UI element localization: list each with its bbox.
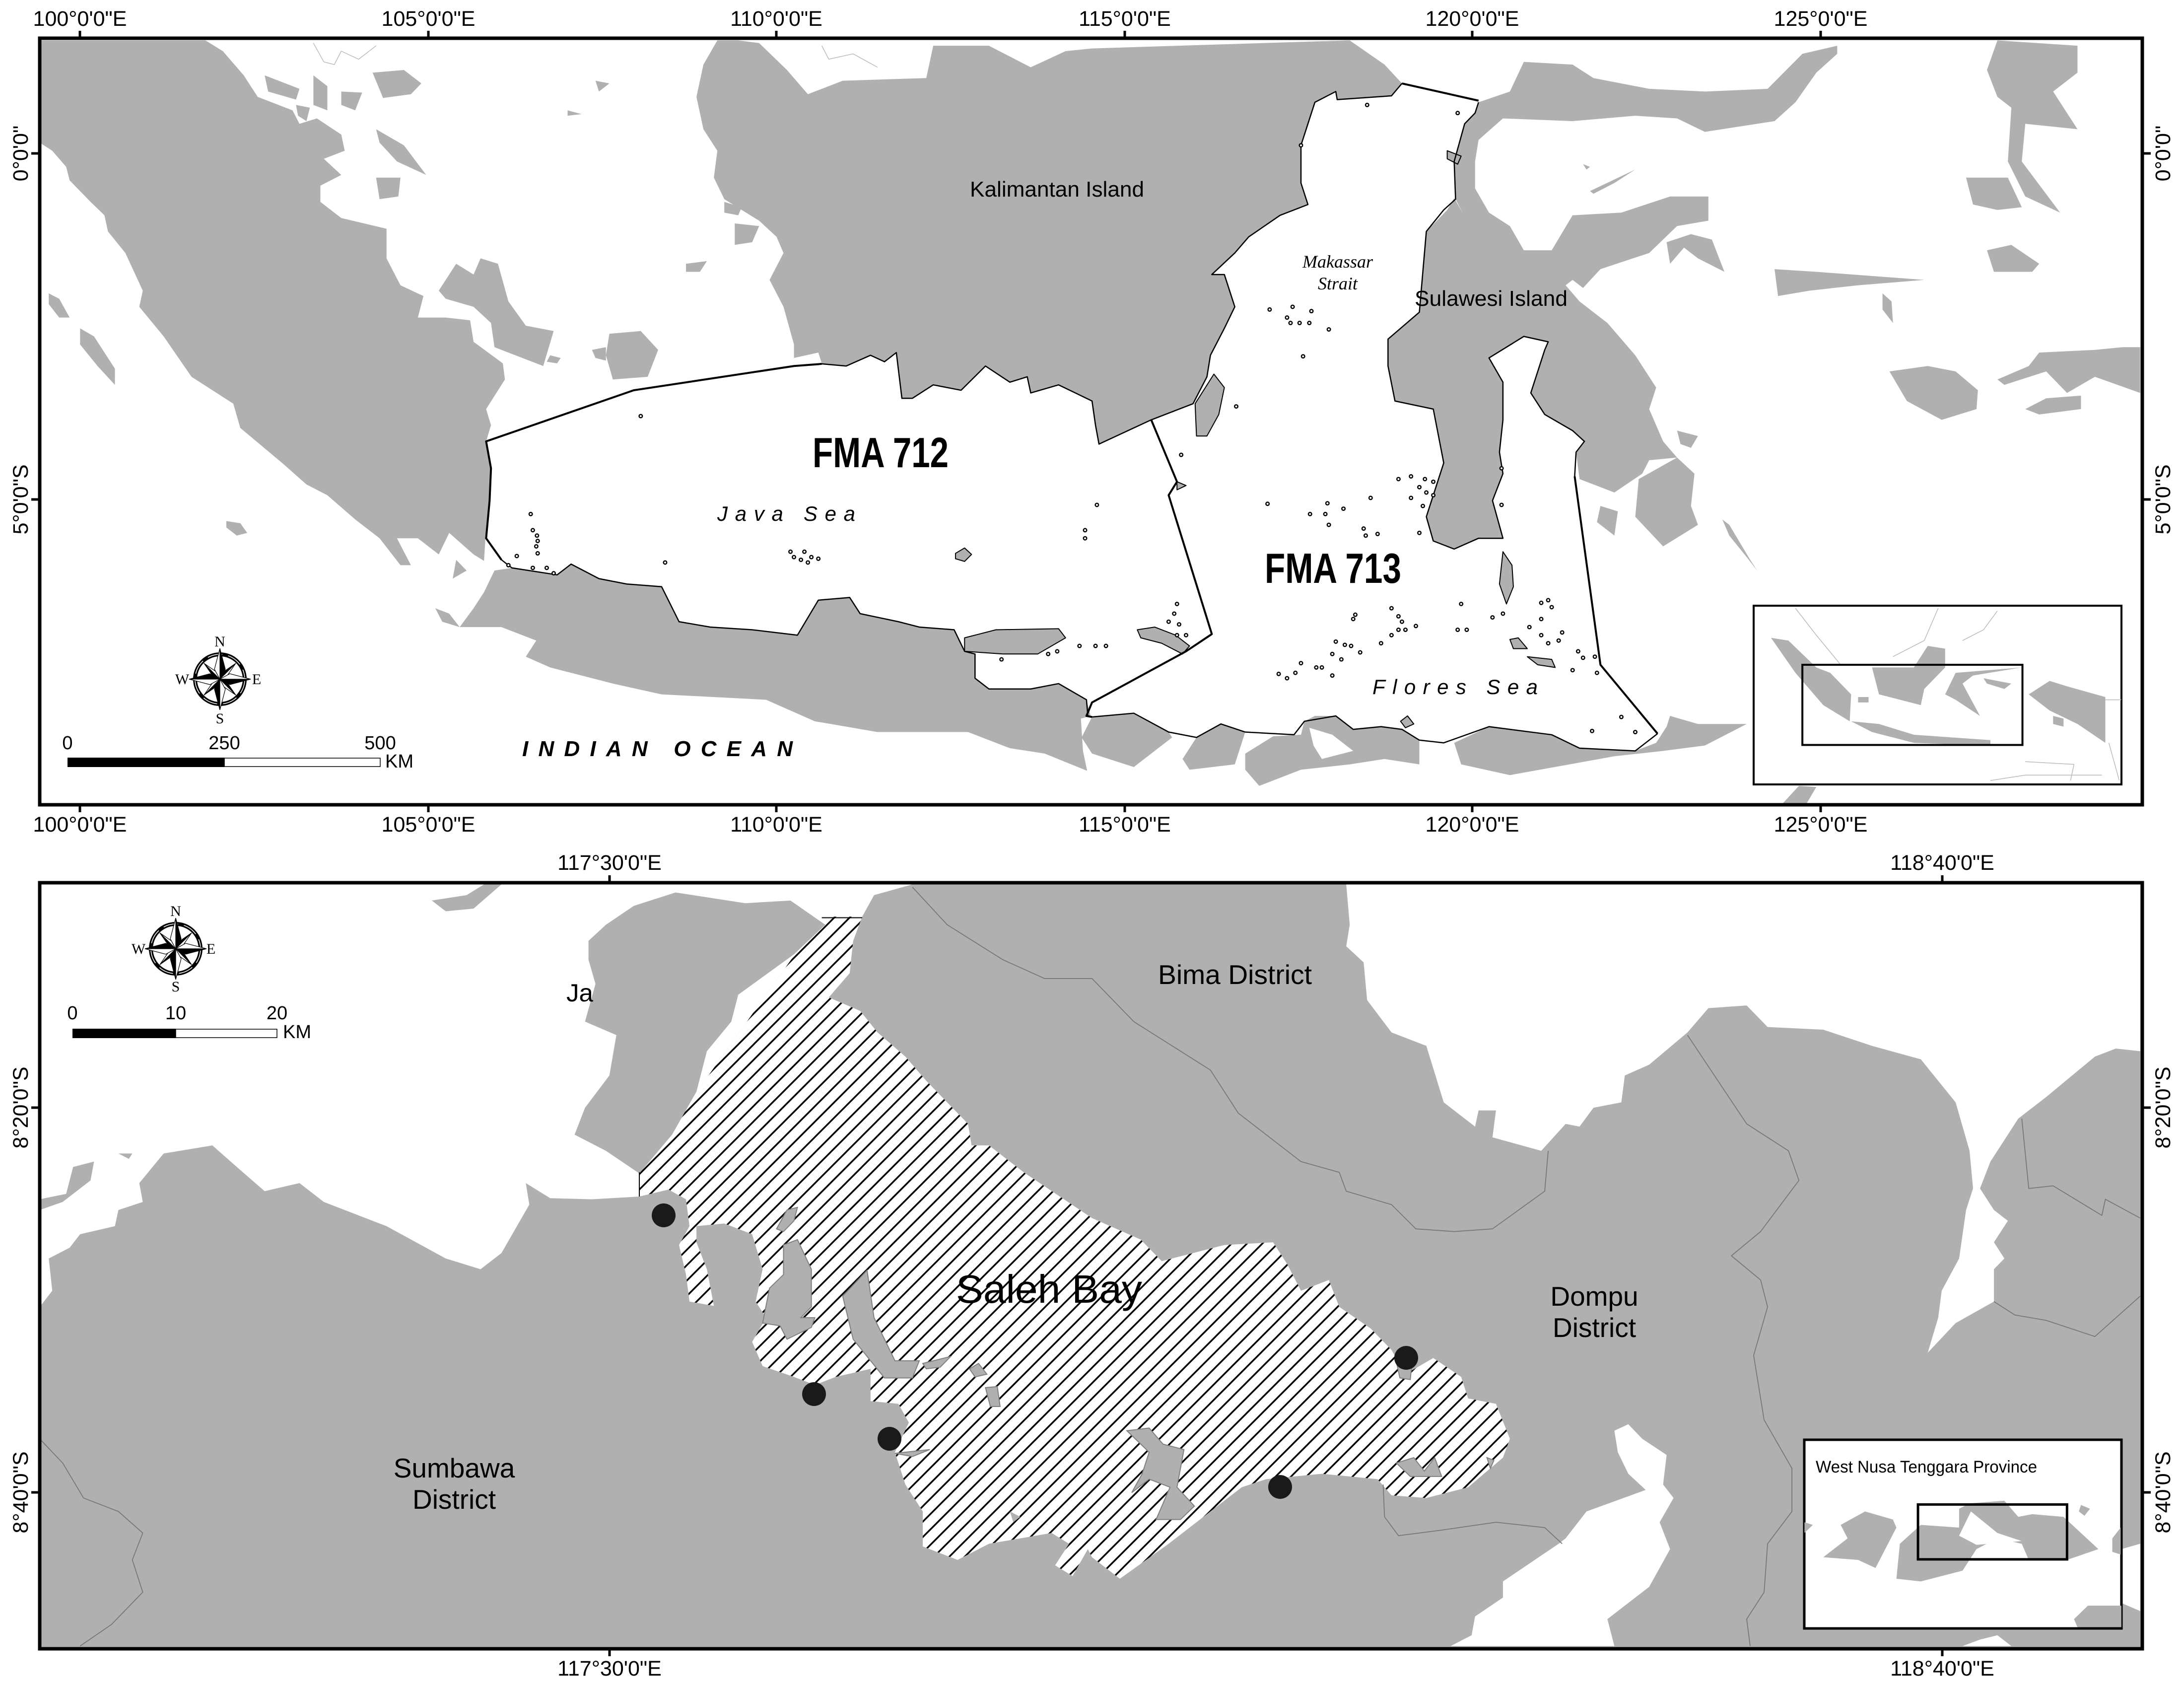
longitude labels top: 125°0'0"E — [1774, 7, 1867, 31]
longitude labels bottom: 100°0'0"E — [33, 813, 127, 837]
small reef islands — [508, 105, 1635, 732]
scale bar: top map: 250 — [208, 733, 240, 754]
longitude labels top: 100°0'0"E — [33, 7, 127, 31]
label: Makassar Strait: Strait — [1318, 274, 1358, 293]
label: Ja: Ja — [566, 979, 593, 1007]
latitude labels: 5°0'0"S — [9, 464, 33, 535]
label: FMA 712: FMA 712 — [813, 429, 949, 477]
sea, bay and islands of Saleh Bay map — [40, 884, 2140, 1646]
scale bar: Saleh Bay map: 10 — [165, 1003, 186, 1024]
Saleh Bay water in regional map — [1309, 728, 1353, 759]
scale bar: Saleh Bay map: 0 — [67, 1003, 78, 1024]
longitude labels top: 120°0'0"E — [1426, 7, 1519, 31]
panel frame — [40, 38, 2142, 805]
latitude labels — [9, 126, 2175, 535]
scale bar: top map: 0 — [62, 733, 73, 754]
south sea — [1451, 1424, 1674, 1646]
inset land — [1804, 1501, 2121, 1627]
latitude labels: 8°20'0"S — [9, 1066, 33, 1149]
label: Sulawesi Island: Sulawesi Island — [1415, 286, 1568, 311]
label: Kalimantan Island: Kalimantan Island — [970, 177, 1144, 202]
panel: Saleh Bay map — [9, 851, 2175, 1681]
scale bar: top map — [62, 733, 413, 772]
longitude labels top: 117°30'0"E — [557, 851, 662, 875]
longitude labels bottom: 125°0'0"E — [1774, 813, 1867, 837]
Moyo island — [575, 893, 825, 1174]
latitude labels: 0°0'0" — [9, 126, 33, 181]
scale bar: Saleh Bay map: KM — [283, 1022, 311, 1043]
land masses: regional map — [40, 40, 2140, 805]
inset extent box — [1802, 665, 2023, 745]
compass rose: Saleh Bay map: N — [170, 903, 181, 919]
longitude labels top: 110°0'0"E — [730, 7, 822, 31]
longitude labels bottom: 115°0'0"E — [1079, 813, 1171, 837]
longitude labels top — [33, 7, 1867, 31]
latitude labels: 8°20'0"S — [2151, 1066, 2175, 1149]
panel: regional map FMA 712 and 713 — [9, 7, 2175, 837]
coast lines bordering FMA areas — [501, 83, 1657, 751]
islands in Saleh Bay — [762, 1207, 1494, 1520]
label: Dompu District: Dompu — [1550, 1281, 1638, 1312]
longitude labels bottom — [33, 813, 1867, 837]
label: Saleh Bay: Saleh Bay — [956, 1267, 1142, 1311]
compass rose: top map: W — [175, 671, 190, 688]
label: Flores Sea: Flores Sea — [1372, 675, 1538, 699]
label: Java Sea: Java Sea — [717, 502, 855, 525]
label: Sumbawa District: District — [412, 1484, 496, 1515]
outlined island group — [1137, 151, 1555, 728]
tick marks — [31, 31, 2151, 812]
longitude labels top: 118°40'0"E — [1890, 851, 1994, 875]
scale bar: top map: 500 — [364, 733, 396, 754]
longitude labels top: 105°0'0"E — [382, 7, 475, 31]
longitude labels bottom: 118°40'0"E — [1890, 1657, 1994, 1681]
scale bar: Saleh Bay map — [67, 1003, 311, 1043]
survey sites — [652, 1203, 1418, 1499]
label: Bima District: Bima District — [1158, 959, 1312, 990]
scale bar: Saleh Bay map: 20 — [267, 1003, 287, 1024]
compass rose: Saleh Bay map: W — [132, 941, 146, 957]
latitude labels: 5°0'0"S — [2151, 464, 2175, 535]
inset extent box — [1918, 1504, 2067, 1559]
inset title: West Nusa Tenggara Province — [1816, 1458, 2037, 1477]
Madura — [964, 629, 1066, 654]
Lesser Sunda islands — [1082, 713, 1816, 805]
inset: West Nusa Tenggara — [1804, 1440, 2121, 1628]
inset land shapes — [1771, 638, 2106, 746]
Sulawesi — [1388, 46, 1837, 549]
compass rose: Saleh Bay map — [132, 903, 215, 995]
longitude labels bottom: 105°0'0"E — [382, 813, 475, 837]
compass rose: top map: N — [214, 633, 225, 650]
eastern regional land — [1082, 40, 2140, 805]
compass rose: top map: S — [216, 710, 224, 727]
longitude labels top — [557, 851, 1994, 875]
compass rose: top map: E — [252, 671, 261, 688]
compass rose: Saleh Bay map: E — [206, 941, 215, 957]
label: Sumbawa District: Sumbawa — [394, 1453, 515, 1483]
label: Indian Ocean: INDIAN OCEAN — [522, 737, 793, 761]
latitude labels — [9, 1066, 2175, 1534]
compass rose: top map — [175, 633, 261, 727]
Sumatra — [40, 40, 505, 565]
latitude labels: 8°40'0"S — [9, 1451, 33, 1534]
longitude labels bottom — [557, 1657, 1994, 1681]
tick marks — [31, 875, 2151, 1656]
east sea — [1346, 884, 2140, 1646]
label: FMA 713: FMA 713 — [1265, 545, 1401, 592]
longitude labels bottom: 110°0'0"E — [730, 813, 822, 837]
Java — [460, 564, 1091, 771]
scale bar: top map: KM — [385, 751, 413, 772]
label: Makassar Strait: Makassar — [1302, 252, 1373, 272]
west sea — [40, 884, 912, 1307]
longitude labels bottom: 120°0'0"E — [1426, 813, 1519, 837]
compass rose: Saleh Bay map: S — [172, 979, 180, 995]
FMA boundary lines — [486, 83, 1657, 734]
latitude labels: 0°0'0" — [2151, 126, 2175, 181]
longitude labels top: 115°0'0"E — [1079, 7, 1171, 31]
Saleh Bay hatched water — [639, 916, 1510, 1579]
northern islets — [40, 884, 1021, 1522]
latitude labels: 8°40'0"S — [2151, 1451, 2175, 1534]
longitude labels bottom: 117°30'0"E — [557, 1657, 662, 1681]
inset: Indonesia locator — [1754, 606, 2121, 784]
Maluku and Southeast Sulawesi islands — [1583, 40, 2140, 570]
fine river lines at the top — [313, 43, 878, 68]
islands around Sumatra — [49, 70, 759, 627]
bay boundary lines — [639, 918, 862, 1196]
panel frame — [40, 883, 2142, 1649]
Kalimantan — [696, 40, 1402, 444]
label: Dompu District: District — [1553, 1312, 1636, 1343]
land base — [40, 883, 2142, 1649]
district boundary lines — [40, 887, 2140, 1646]
